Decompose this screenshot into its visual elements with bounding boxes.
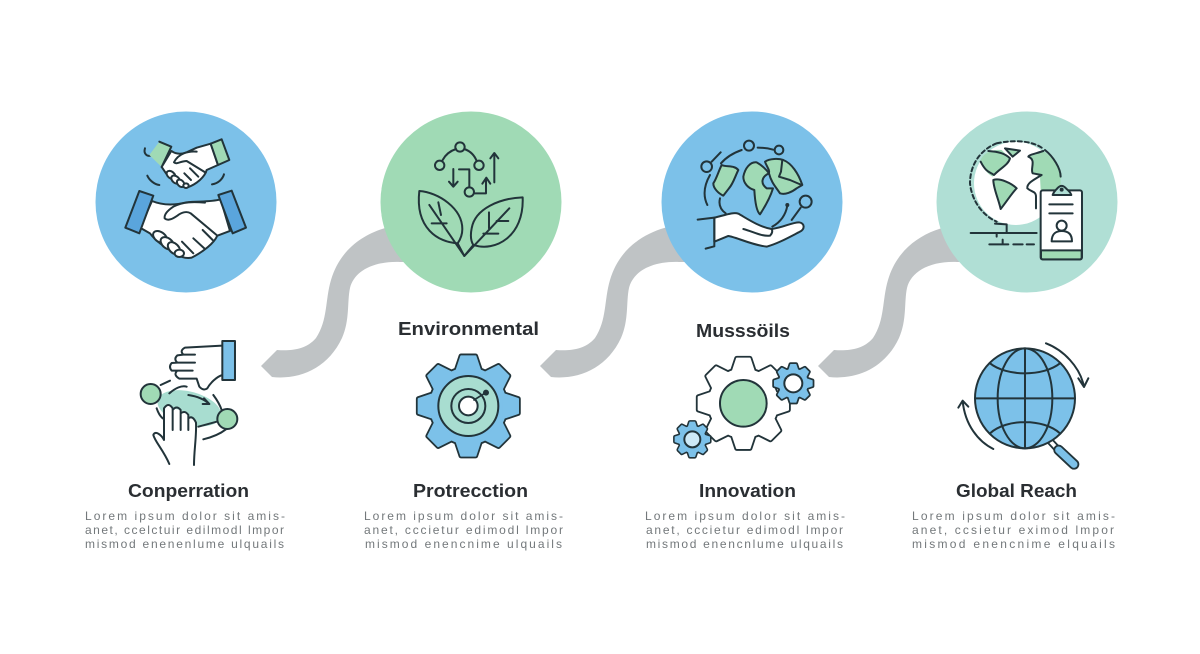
- text block: Cooperation: mismod enenenlume ulquails: [85, 537, 284, 551]
- text block: Innovation: [645, 481, 845, 551]
- text block: Protection: Lorem ipsum dolor sit amis-: [364, 509, 563, 523]
- text block: Protection: Protrecction: [413, 481, 528, 501]
- icon: three gears: [675, 359, 812, 457]
- text block: Cooperation: Conperration: [128, 481, 249, 501]
- icon: continents: [713, 159, 802, 214]
- connector: step 1 to 2: [261, 224, 420, 377]
- icon: world globe: [970, 141, 1061, 244]
- circle icon: handshake: [96, 112, 276, 292]
- icon: hands and nodes: [141, 341, 237, 465]
- icon: small handshake: [145, 139, 229, 189]
- text block: Innovation: mismod enencnlume ulquails: [646, 537, 843, 551]
- text block: Global Reach: mismod enencnime elquails: [912, 537, 1115, 551]
- text block: Cooperation: [85, 481, 285, 551]
- text block: Global Reach: Global Reach: [956, 481, 1077, 501]
- text block: Global Reach: [912, 481, 1115, 551]
- text block: Global Reach: anet, ccsietur eximod lmpor: [912, 523, 1114, 537]
- text block: Cooperation: Lorem ipsum dolor sit amis-: [85, 509, 285, 523]
- icon: orbit nodes: [701, 141, 812, 227]
- icon: target gear: [419, 356, 518, 456]
- text block: Global Reach: Lorem ipsum dolor sit amis-: [912, 509, 1115, 523]
- text block: Innovation: Innovation: [699, 481, 796, 501]
- icon: large handshake: [125, 191, 246, 258]
- icon: globe with magnifier: [958, 343, 1088, 464]
- upper hand: [170, 341, 235, 390]
- text block: Protection: anet, cccietur edimodl lmpor: [364, 523, 563, 537]
- connector: step 2 to 3: [540, 224, 699, 377]
- circle icon: globe and clipboard: [936, 112, 1118, 292]
- arcs and nodes: [141, 381, 237, 439]
- text block: Protection: [364, 481, 563, 551]
- icon: clipboard: [1041, 186, 1082, 259]
- circle icon: leaves and flow: [380, 112, 562, 292]
- icon: flow diagram: [435, 142, 498, 197]
- ellipse background: [153, 384, 225, 433]
- connector: step 3 to 4: [818, 224, 977, 377]
- icon: leaves: [419, 191, 523, 256]
- floating heading: Environmental: Environmental: [398, 319, 539, 339]
- icon: open hand: [698, 213, 804, 249]
- floating heading: Musssöils: Musssöils: [696, 321, 790, 341]
- text block: Innovation: anet, cccietur edimodl lmpor: [646, 523, 843, 537]
- text block: Cooperation: anet, ccelctuir edilmodl lmpor: [85, 523, 284, 537]
- text block: Innovation: Lorem ipsum dolor sit amis-: [645, 509, 845, 523]
- text block: Protection: mismod enencnime ulquails: [365, 537, 562, 551]
- circle icon: globe in hand: [662, 112, 842, 292]
- lower hand: [153, 405, 196, 465]
